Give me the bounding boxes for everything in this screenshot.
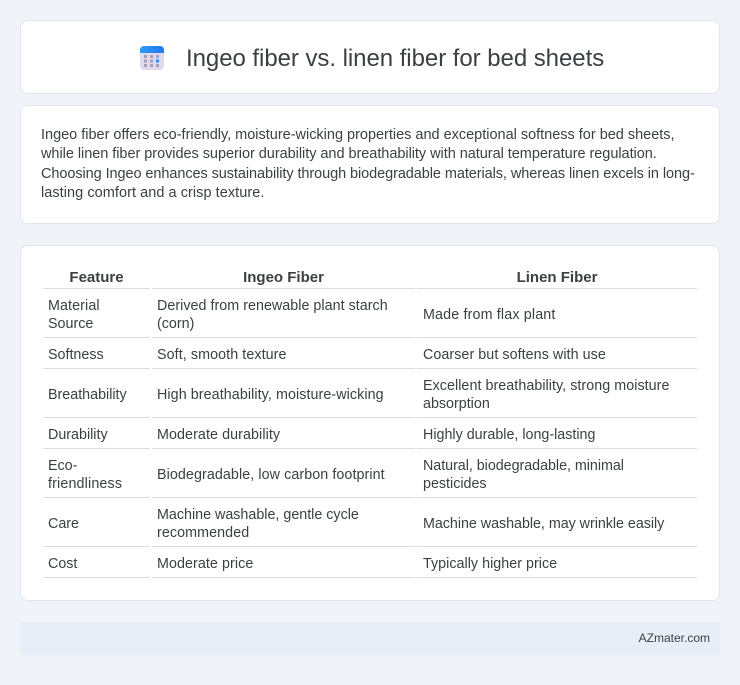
- panel: comparison table card: [20, 245, 720, 601]
- comparison table: Soft, smooth texture: [157, 347, 287, 363]
- row: eco-friendliness: [43, 458, 697, 498]
- panel: title card: [20, 20, 720, 94]
- comparison table: [43, 269, 697, 578]
- comparison table: Softness: [48, 347, 104, 363]
- comparison table: friendliness: [48, 476, 122, 492]
- comparison table: Material: [48, 298, 100, 314]
- comparison table: Natural, biodegradable, minimal: [423, 458, 624, 474]
- row: breathability: [43, 378, 697, 418]
- comparison table: Derived from renewable plant starch: [157, 298, 388, 314]
- comparison table: Biodegradable, low carbon footprint: [157, 467, 385, 483]
- row: care: [43, 507, 697, 547]
- table header: [43, 269, 697, 289]
- comparison table: Machine washable, gentle cycle: [157, 507, 359, 523]
- row: durability: [43, 427, 697, 449]
- comparison table: recommended: [157, 525, 249, 541]
- comparison table: Breathability: [48, 387, 127, 403]
- comparison table: Made from flax plant: [423, 307, 556, 323]
- intro text: while linen fiber provides superior durability and breathability with natural temperature regulation.: [41, 146, 657, 162]
- comparison table: Cost: [48, 556, 77, 572]
- comparison table: Eco-: [48, 458, 77, 474]
- comparison table: Feature: [69, 269, 124, 286]
- intro text: lasting comfort and a crisp texture.: [41, 185, 264, 201]
- panel: intro card: [20, 105, 720, 224]
- comparison table: Highly durable, long-lasting: [423, 427, 595, 443]
- comparison table: Excellent breathability, strong moisture: [423, 378, 670, 394]
- footer bar: [20, 622, 720, 655]
- intro text: Choosing Ingeo enhances sustainability through biodegradable materials, whereas linen excels in long-: [41, 166, 695, 182]
- comparison table: Linen Fiber: [517, 269, 597, 286]
- icon: calendar: [140, 46, 164, 70]
- comparison table: absorption: [423, 396, 490, 412]
- row: cost: [43, 556, 697, 578]
- title: Ingeo fiber vs. linen fiber for bed sheets: [186, 45, 604, 72]
- comparison table: (corn): [157, 316, 194, 332]
- comparison table: Typically higher price: [423, 556, 557, 572]
- comparison table: Moderate durability: [157, 427, 280, 443]
- comparison table: High breathability, moisture-wicking: [157, 387, 384, 403]
- comparison table: Ingeo Fiber: [243, 269, 324, 286]
- intro text: Ingeo fiber offers eco-friendly, moisture-wicking properties and exceptional softness for bed sheets,: [41, 127, 675, 143]
- intro text: [41, 127, 695, 201]
- footer text: AZmater.com: [639, 631, 710, 645]
- row: material source: [43, 298, 697, 338]
- comparison table: Durability: [48, 427, 108, 443]
- comparison table: Coarser but softens with use: [423, 347, 606, 363]
- comparison table: Care: [48, 516, 79, 532]
- comparison table: pesticides: [423, 476, 487, 492]
- comparison table: Moderate price: [157, 556, 253, 572]
- comparison table: Source: [48, 316, 93, 332]
- row: softness: [43, 347, 697, 369]
- comparison table: Machine washable, may wrinkle easily: [423, 516, 664, 532]
